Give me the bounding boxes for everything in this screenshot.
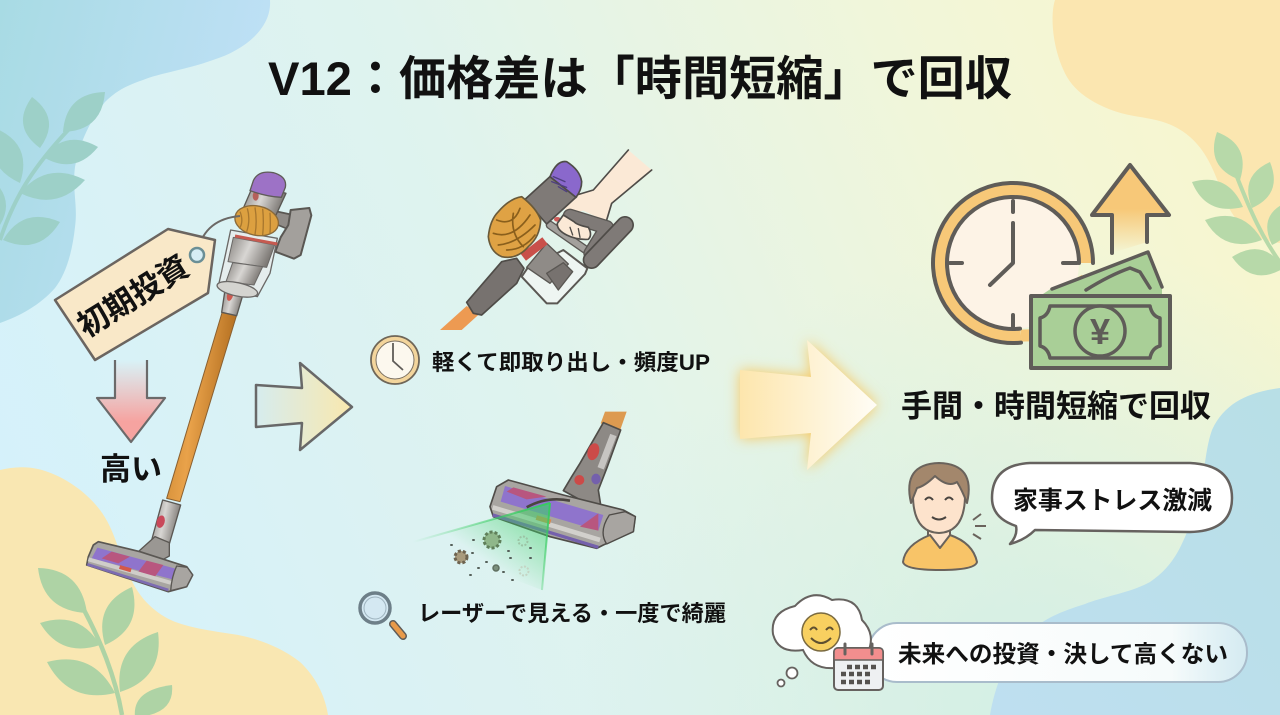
finger lines — [570, 227, 580, 237]
front indicator — [536, 515, 551, 524]
feature text: light and quick: 軽くて即取り出し・頻度UP — [432, 350, 710, 375]
vacuum handle pad — [275, 208, 311, 259]
brush bar — [92, 548, 178, 580]
grip inner — [570, 216, 607, 253]
neck highlight — [601, 435, 613, 468]
magnifier icon — [360, 593, 403, 636]
floor head casing — [87, 542, 193, 592]
speech sparks — [973, 514, 986, 539]
arrow: down, high price — [97, 360, 165, 442]
clock face — [947, 197, 1079, 329]
feature text: laser: レーザーで見える・一度で綺麗 — [418, 601, 726, 626]
battery pad inner — [592, 225, 625, 260]
handheld vacuum illustration — [440, 150, 652, 330]
purple pivot — [591, 474, 601, 484]
head neck — [138, 537, 169, 559]
lower cylinder — [226, 263, 263, 285]
head neck — [563, 423, 621, 505]
future pill — [868, 623, 1247, 682]
purple base — [493, 515, 598, 547]
price tag — [55, 216, 240, 360]
battery pad — [592, 225, 625, 260]
joint red oval — [155, 515, 166, 529]
clear bin — [218, 230, 277, 297]
cyclone pleats — [493, 208, 535, 250]
cyclone pleats — [239, 207, 270, 235]
clock hands — [990, 223, 1013, 285]
time and money icon — [933, 165, 1170, 368]
red band — [523, 241, 545, 257]
calendar icon — [834, 644, 883, 690]
blob: top right yellow — [1053, 0, 1280, 243]
silver cylinder — [228, 237, 275, 267]
grip — [570, 216, 607, 253]
blob: bottom left yellow — [0, 467, 328, 715]
tag hole — [190, 248, 204, 262]
brush stripes — [507, 487, 598, 531]
clock ticks — [950, 201, 1077, 328]
motor housing — [244, 185, 286, 215]
fist — [557, 215, 590, 239]
cyclone — [232, 202, 281, 240]
lower handle bar — [550, 225, 588, 252]
inner cylinder — [527, 243, 568, 283]
flange — [216, 279, 259, 300]
red button — [119, 565, 132, 572]
thought cloud — [773, 595, 871, 686]
arrow: to benefits — [256, 363, 352, 450]
brush bar — [501, 486, 603, 531]
tag string — [197, 216, 240, 252]
tag label: 初期投資 — [71, 249, 195, 344]
silver rail — [88, 559, 175, 584]
benefit heading: 手間・時間短縮で回収 — [901, 389, 1211, 424]
purple cap — [550, 162, 582, 197]
yen coin — [1075, 306, 1125, 356]
red button lower — [574, 475, 584, 485]
red trigger — [554, 217, 561, 222]
clock ring — [940, 190, 1086, 336]
orange tube — [601, 412, 627, 431]
wand sleeve — [467, 258, 524, 315]
laser head illustration — [490, 412, 635, 548]
label: 高い: 高い — [100, 452, 162, 487]
upper wand sleeve — [222, 290, 243, 316]
blob: bottom right blue — [990, 388, 1280, 715]
sprig: bottom left leaves — [38, 568, 172, 715]
brush stripes — [102, 552, 163, 577]
purple base — [87, 564, 168, 590]
big glowing arrow — [740, 340, 877, 470]
red button top — [585, 442, 601, 462]
lower wand joint — [152, 500, 181, 544]
cyclone — [488, 197, 541, 257]
eyes and mouth — [925, 498, 953, 520]
vacuum handle arm — [270, 210, 293, 230]
shoulders — [903, 535, 977, 570]
laser beam — [413, 503, 550, 590]
sleeve red mark — [226, 289, 234, 302]
dust particles — [451, 532, 531, 580]
orange wand — [440, 306, 479, 330]
title: V12：価格差は「時間短縮」で回収 — [268, 52, 1012, 105]
smiling person — [903, 463, 986, 570]
motor body — [525, 177, 577, 224]
blob: top left blue — [0, 0, 270, 323]
laser edges — [413, 503, 550, 542]
clock outlines — [933, 183, 1093, 343]
clock icon small — [371, 336, 419, 384]
front note — [1031, 296, 1170, 368]
up arrow — [1092, 165, 1169, 253]
face — [913, 464, 965, 533]
yen symbol: ¥ — [1090, 311, 1110, 352]
back note — [1040, 252, 1162, 296]
head casing — [490, 480, 635, 548]
arm outline — [563, 150, 652, 220]
orange wand — [167, 312, 237, 502]
note inner frame — [1040, 306, 1160, 358]
tag shape — [55, 229, 215, 360]
ring tail — [1021, 280, 1085, 336]
end cap — [603, 512, 635, 544]
sprig: top left leaves — [0, 92, 105, 245]
motor red dot — [253, 191, 259, 201]
dust bin — [522, 250, 587, 303]
sprig: top right leaves — [1192, 132, 1280, 275]
end cap — [171, 566, 193, 591]
back note outline — [1052, 252, 1162, 290]
future text: 未来への投資・決して高くない — [898, 641, 1228, 667]
smiley — [802, 613, 840, 651]
speech text: 家事ストレス激減 — [1013, 487, 1212, 515]
arm — [563, 150, 652, 222]
dark lip — [527, 499, 570, 507]
red band — [235, 236, 277, 244]
silver rail — [493, 507, 600, 540]
hair — [909, 463, 969, 503]
laser right edge — [542, 503, 550, 590]
speech bubble — [992, 463, 1232, 544]
cap vents — [552, 177, 567, 192]
neck — [928, 522, 950, 548]
purple cap — [250, 172, 286, 197]
full vacuum cleaner illustration — [87, 172, 311, 592]
inner cup — [547, 263, 573, 290]
lower handle bar inner — [550, 225, 588, 252]
